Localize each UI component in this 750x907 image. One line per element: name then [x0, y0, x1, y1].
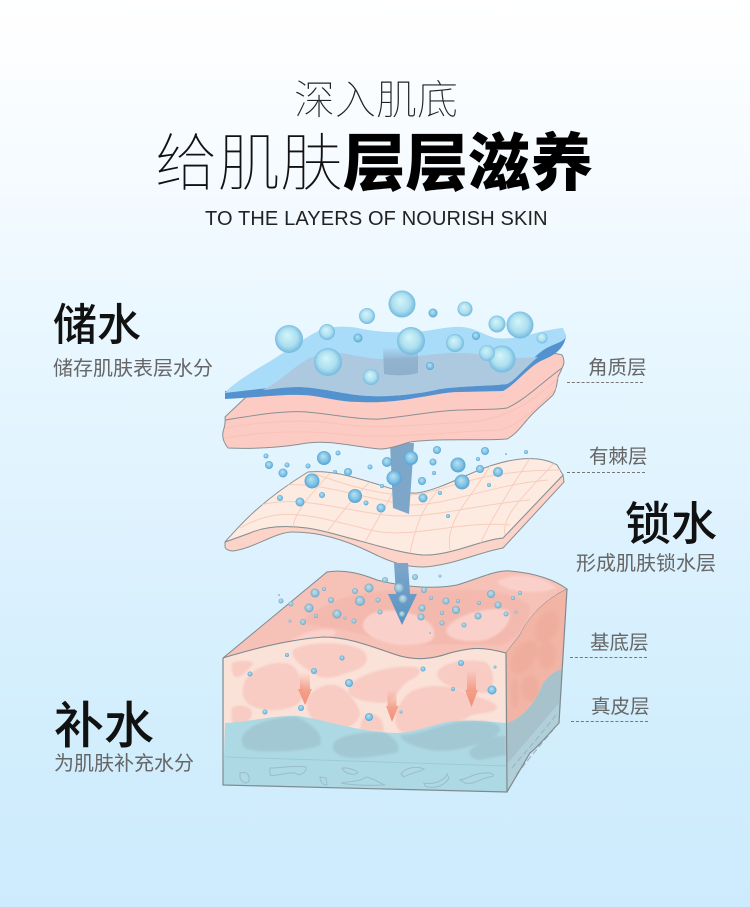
layer: middle	[225, 458, 564, 567]
heading: store water: 储水	[53, 301, 141, 350]
right side pattern	[504, 607, 564, 708]
title: line two: 给肌肤层层滋养	[155, 129, 593, 199]
dermis pockets	[240, 766, 494, 787]
grey inner window	[263, 353, 538, 396]
dermis front	[223, 716, 507, 792]
cube top blotches	[290, 576, 556, 645]
leader line	[567, 472, 645, 473]
cube right side	[506, 589, 567, 723]
central arrow upper	[390, 443, 414, 514]
label: basal layer: 基底层	[590, 632, 649, 654]
title: line one: 深入肌底	[294, 77, 458, 123]
small upper bubbles	[354, 308, 480, 370]
light blue surface	[225, 327, 566, 396]
inner square	[383, 347, 418, 375]
cube outline	[223, 589, 567, 792]
label: dermis: 真皮层	[591, 696, 650, 718]
middle grid	[240, 458, 560, 553]
right side lower dermis	[507, 703, 559, 792]
middle top surface	[225, 459, 563, 555]
cube front	[223, 637, 507, 792]
pink body	[223, 352, 564, 449]
leader line	[567, 382, 643, 383]
layer: bottom cube	[223, 571, 567, 792]
label: spinous layer: 有棘层	[589, 446, 648, 468]
cube top surface	[223, 571, 567, 659]
text: replenish caption: 为肌肤补充水分	[54, 753, 194, 775]
skin layers illustration	[222, 290, 568, 793]
middle side	[225, 475, 564, 567]
text: store water caption: 储存肌肤表层水分	[53, 358, 213, 380]
leader line	[570, 657, 647, 658]
label: stratum corneum: 角质层	[588, 357, 647, 379]
dermis line	[225, 757, 507, 766]
heading: lock water: 锁水	[625, 498, 717, 550]
central arrow lower	[388, 563, 417, 625]
pink line	[225, 368, 562, 420]
large bubbles	[275, 290, 548, 385]
pink strata	[225, 378, 558, 438]
layer: top blue	[225, 327, 566, 402]
red arrows	[298, 670, 478, 722]
cube surface bubbles	[278, 574, 522, 634]
heading: replenish water: 补水	[54, 698, 154, 754]
cube front droplets	[248, 653, 496, 721]
mid bubbles	[264, 446, 528, 518]
text: lock water caption: 形成肌肤锁水层	[576, 553, 716, 575]
dark band	[225, 335, 566, 402]
right side dermis	[506, 669, 562, 792]
subtitle: english: TO THE LAYERS OF NOURISH SKIN	[205, 208, 548, 230]
dermis blotches	[242, 717, 506, 760]
front blotches	[231, 643, 497, 733]
leader line	[571, 721, 648, 722]
layer: top pink	[223, 352, 564, 449]
cube top dark zone	[300, 590, 530, 646]
